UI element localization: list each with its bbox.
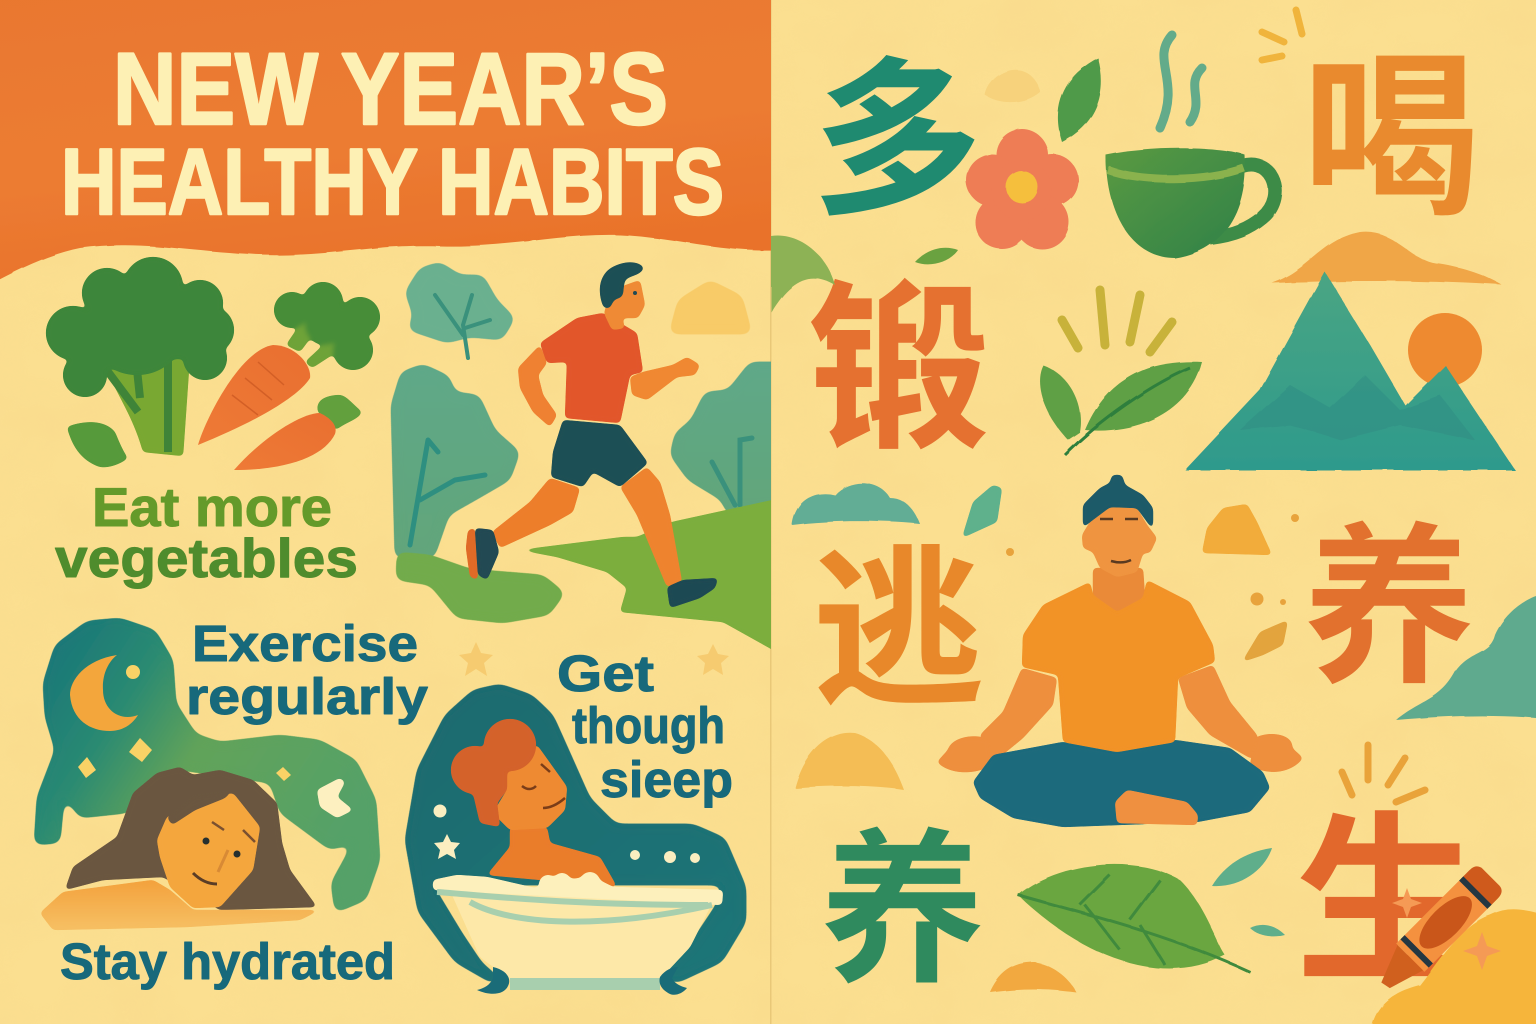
tub base (510, 978, 660, 990)
icon: small broccoli and carrot (198, 282, 380, 445)
icon: small leaf (915, 248, 958, 264)
left hand (937, 736, 992, 772)
title (65, 51, 722, 216)
label: exercise regularly (186, 615, 429, 725)
icon: sparks mid (1062, 290, 1172, 352)
head (604, 280, 645, 330)
label: eat more vegetables: vegetables (55, 527, 358, 589)
label: exercise regularly: Exercise (192, 615, 418, 672)
figure: bathing woman (451, 719, 617, 887)
character: yang green: 养 (820, 819, 985, 1003)
icon: small stars (78, 665, 353, 818)
head (1082, 507, 1157, 577)
shoulder (40, 880, 320, 930)
icon: teal leaf (962, 485, 1002, 538)
character: he: 喝 (1302, 39, 1480, 238)
front shoe (667, 578, 718, 608)
icon: small teal leaf (1250, 925, 1285, 936)
decoration: small dots (1006, 514, 1299, 606)
label: get though sieep (557, 645, 733, 808)
label: stay hydrated: Stay hydrated (60, 933, 395, 990)
label: get though sieep: sieep (600, 751, 733, 808)
title banner (0, 0, 790, 290)
icon: crayon logo (1369, 863, 1505, 999)
shoe sole (466, 528, 478, 580)
decoration: orange mound (1202, 504, 1272, 555)
back leg (492, 478, 580, 548)
panel: right Chinese wellness poster (771, 10, 1536, 1024)
face details (522, 764, 565, 808)
icon: mountains (1185, 272, 1515, 470)
icon: leaf top (1058, 58, 1101, 142)
icon: stars (434, 804, 700, 863)
icon: leaf (67, 422, 128, 467)
decoration: bottom-right wash (1370, 909, 1536, 1024)
left arm (518, 345, 557, 427)
face details (193, 822, 255, 884)
face (157, 793, 260, 908)
icon: steam (1160, 35, 1202, 128)
icon: large leaf (1018, 864, 1250, 972)
tub feet (477, 967, 509, 994)
label: get though sieep: though (572, 697, 725, 754)
icon: sparks top (1262, 10, 1302, 60)
hair (65, 767, 317, 910)
hair (600, 262, 644, 308)
right hand (1250, 734, 1303, 772)
icon: bathtub (433, 872, 723, 995)
title: HEALTHY HABITS (61, 129, 724, 234)
character: stylised orange glyph: 逃 (812, 535, 984, 727)
title: NEW YEAR’S (113, 32, 668, 146)
hair bun (451, 719, 536, 827)
hair (1083, 475, 1153, 530)
icon: sparkles (1392, 888, 1501, 970)
icon: broccoli (46, 257, 234, 456)
tub rim and foam (433, 872, 723, 905)
label: exercise regularly: regularly (186, 668, 429, 725)
fringe (168, 794, 229, 824)
bath blob (405, 684, 746, 984)
character: yang orange: 养 (1303, 513, 1475, 705)
icon: twin leaves (1040, 362, 1202, 455)
face details (1100, 519, 1138, 562)
left arm (980, 668, 1057, 765)
front leg (620, 467, 682, 587)
tub stripes (437, 892, 712, 922)
label: eat more vegetables (54, 488, 356, 589)
icon: teal leaf lower (1212, 848, 1272, 886)
illustration: sleeping woman (34, 618, 380, 930)
shirt (1022, 580, 1215, 752)
icon: moon (70, 655, 138, 731)
decoration: bottom mound (990, 962, 1076, 992)
icon: sparks right (1342, 745, 1425, 802)
back shoe (475, 528, 499, 580)
character: duo: 多 (812, 47, 982, 237)
eye (633, 291, 637, 295)
legs (973, 740, 1270, 827)
panel: left habits poster (0, 0, 800, 995)
decoration: orange mound (1272, 232, 1502, 285)
icon: vegetables (46, 257, 380, 470)
icon: tea cup (1106, 148, 1275, 258)
right arm (630, 357, 700, 400)
label: get though sieep: Get (557, 645, 654, 702)
character: sheng: 生 (1295, 800, 1477, 1004)
shoulders (487, 827, 617, 887)
right arm (1178, 665, 1263, 758)
night blob (34, 618, 380, 913)
icon: sun (1408, 313, 1482, 387)
decoration: green corner shape (771, 235, 835, 312)
decoration: right teal cloud (1396, 596, 1536, 720)
decoration: teal cloud (792, 483, 920, 525)
illustration: runner scene (391, 262, 800, 665)
neck (1093, 568, 1145, 612)
decoration: pale mound (985, 70, 1040, 102)
icon: second carrot (234, 395, 362, 470)
figure: meditating man (937, 475, 1303, 827)
character: duan: 锻 (808, 268, 990, 472)
illustration: woman in bath (405, 684, 746, 995)
icon: stars (459, 642, 729, 676)
shorts (551, 420, 648, 487)
shirt (540, 313, 643, 423)
face (493, 745, 567, 830)
figure: runner (466, 262, 718, 608)
tub body (450, 890, 716, 979)
icon: flower (966, 129, 1078, 249)
decoration: yellow mound (795, 733, 904, 790)
foot (1115, 790, 1198, 825)
label: eat more vegetables: Eat more (92, 476, 332, 538)
scenery (391, 262, 800, 665)
icon: orange leaf (1242, 620, 1288, 662)
figure: woman with long hair (40, 767, 320, 930)
